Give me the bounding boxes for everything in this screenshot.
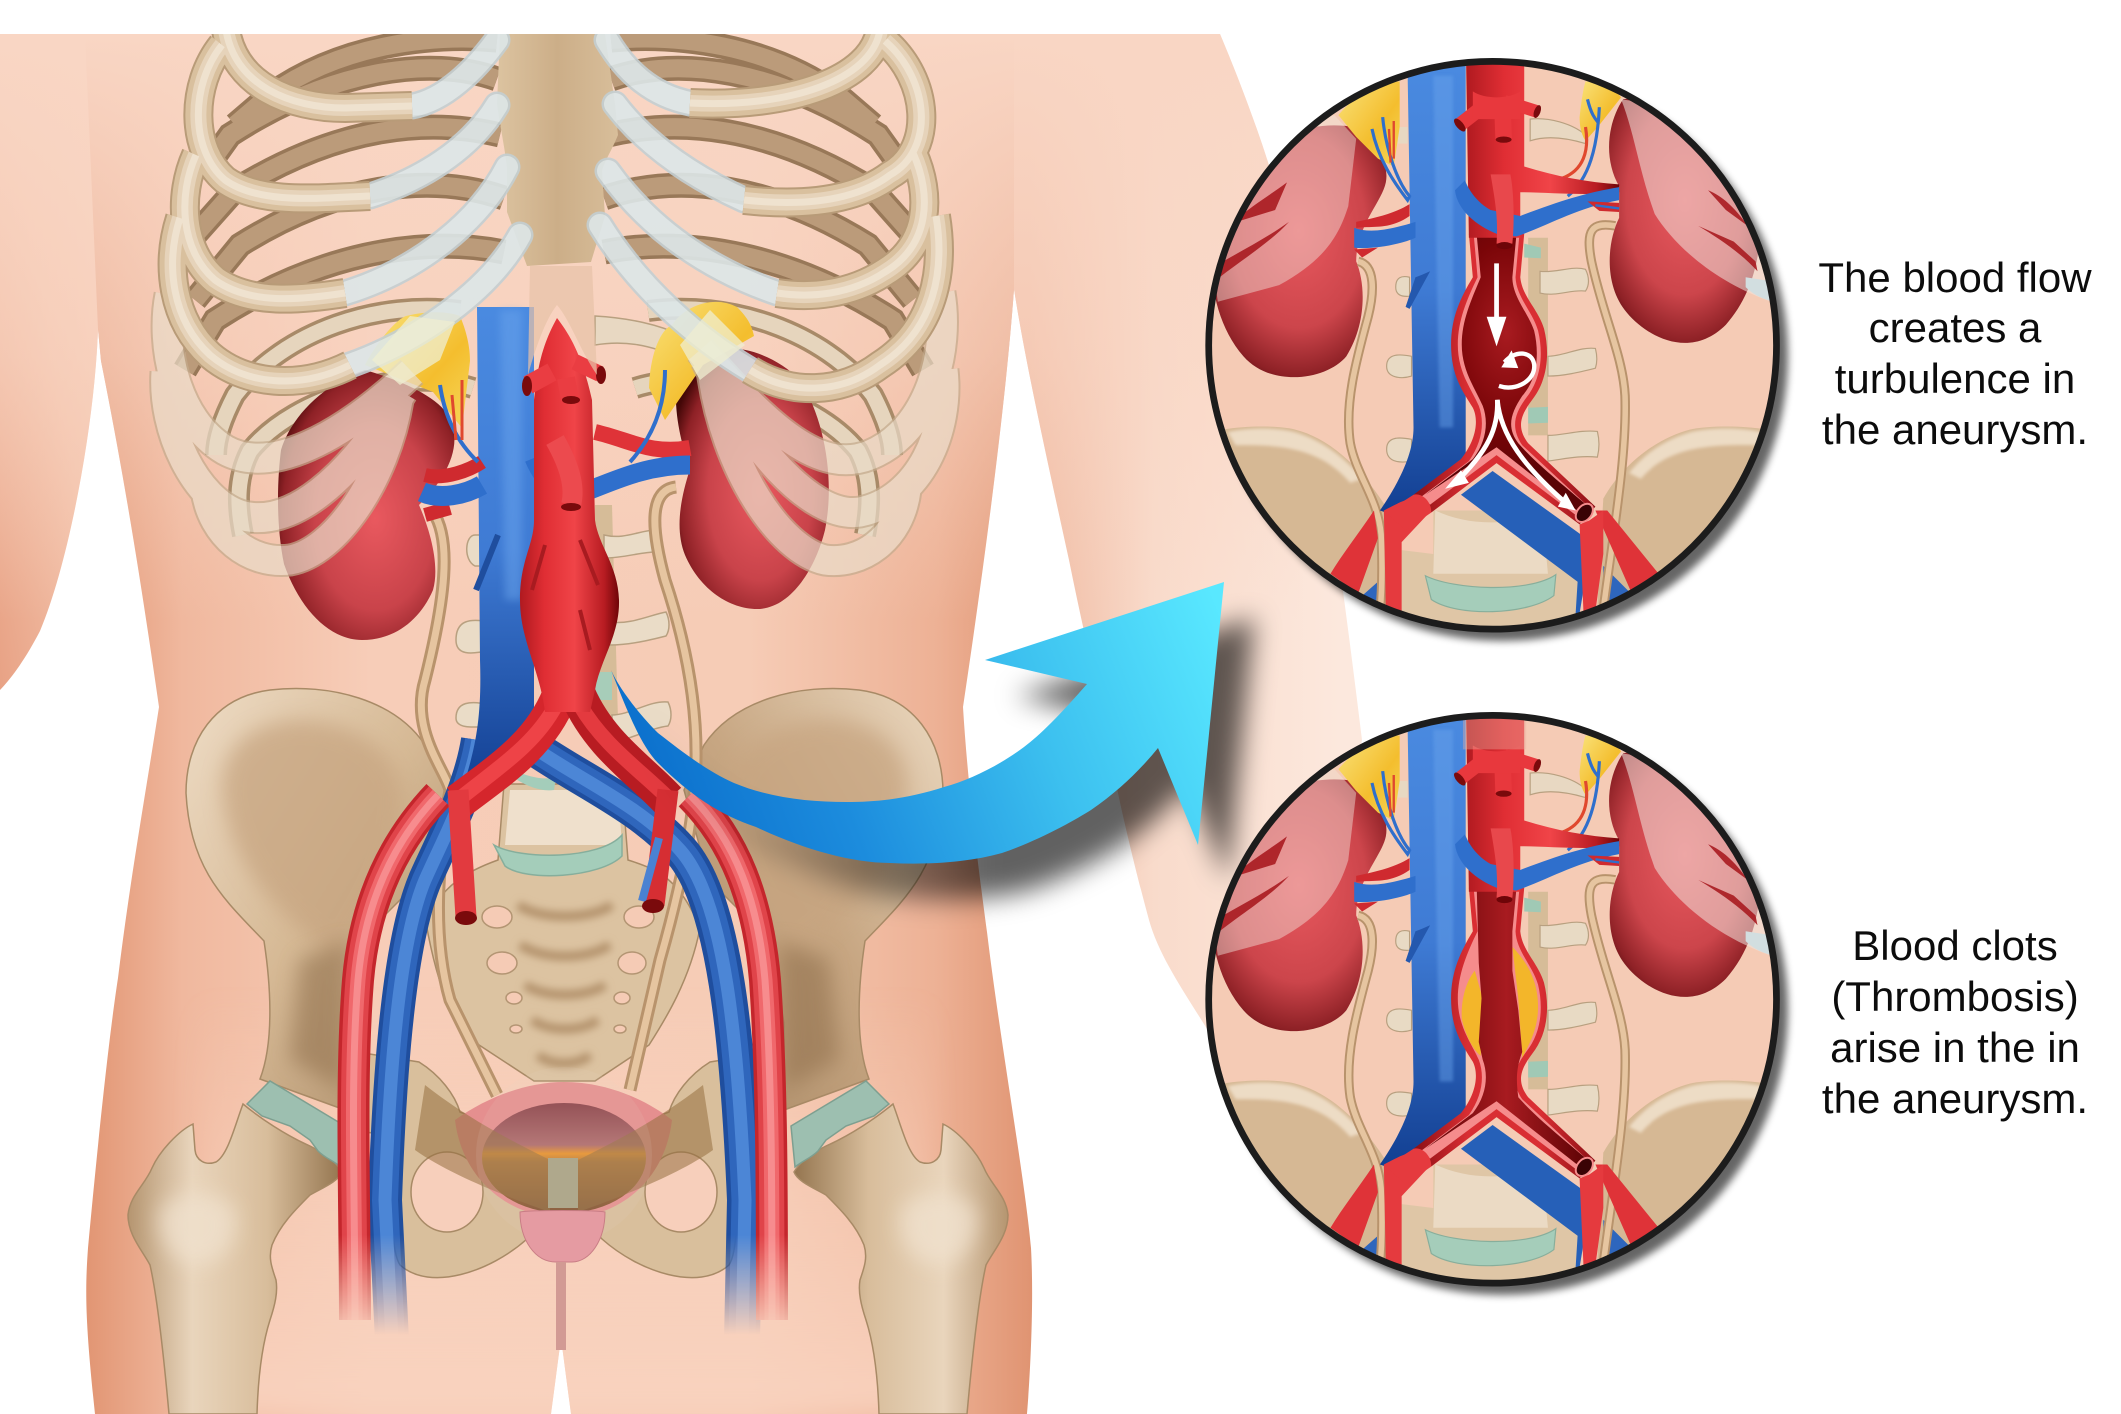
pubic bones right: [564, 1050, 784, 1278]
circle 2 border: [1209, 715, 1776, 1283]
common iliac left: [458, 695, 560, 802]
adrenal arteries: [452, 380, 462, 440]
caption 1: creates a: [1869, 304, 2042, 351]
inferior vena cava: [462, 307, 534, 790]
vertebra body highlight: [505, 790, 622, 845]
back ribs: [185, 39, 923, 535]
intervertebral disc: [494, 835, 622, 876]
ureter right: [630, 487, 696, 1090]
femur highlights: [159, 1193, 977, 1265]
adrenal veins: [440, 370, 665, 462]
aorta top fade: [1463, 718, 1526, 750]
common iliac right: [578, 695, 668, 800]
body silhouette: [0, 34, 1362, 1414]
cartilage: [345, 40, 777, 370]
thrombosed aneurysm: [1404, 888, 1596, 1178]
caption 2: the aneurysm.: [1822, 1075, 2088, 1122]
pubic arch over bladder: [415, 1085, 713, 1212]
caption 2: (Thrombosis): [1831, 973, 2079, 1020]
right vein: [530, 745, 745, 1340]
caption 1: [1818, 254, 2092, 453]
upper light wash: [0, 34, 1269, 564]
torso: [85, 34, 1032, 1414]
right arm: [1000, 34, 1362, 1100]
ilium inner shading: [222, 720, 907, 960]
thrombus clots: [1462, 947, 1538, 1058]
internal iliac branches: [455, 790, 668, 925]
arrow: [611, 582, 1224, 864]
sacrum ridges: [518, 905, 612, 1063]
caption 2: Blood clots: [1852, 922, 2058, 969]
spine vertebrae: [456, 316, 680, 742]
left artery: [353, 795, 438, 1320]
adrenal gland right: [649, 302, 754, 420]
ureter left: [421, 512, 497, 1095]
upper ribs left: [173, 30, 412, 381]
left renal vessels: [425, 462, 482, 515]
pubic bones left: [345, 1050, 565, 1278]
upper disc: [514, 770, 556, 790]
translucent lower ribs: [166, 293, 944, 561]
vena cava highlight: [500, 310, 522, 600]
aneurysm cross section: [1404, 234, 1596, 524]
lower light wash: [210, 1106, 927, 1414]
iliac vessels: [353, 740, 772, 1340]
aorta and renal vessels: [1452, 62, 1619, 249]
left vein: [385, 740, 478, 1340]
renal vessels: [422, 370, 690, 515]
L5 vertebra and sacrum: [426, 784, 700, 1081]
callout circle 2: thrombosis: [1200, 694, 1793, 1295]
right renal artery: [595, 432, 690, 450]
open lumen: [1425, 890, 1587, 1167]
caption 2: [1822, 922, 2088, 1122]
caption 1: the aneurysm.: [1822, 406, 2088, 453]
xiphoid process: [528, 266, 597, 375]
arrow shadow: [641, 618, 1254, 900]
small branch on vena cava: [476, 535, 498, 590]
right femur: [794, 1104, 1008, 1414]
adrenal translucent overlay: [372, 310, 745, 385]
kidney left: [278, 370, 454, 640]
flow arrows: [1445, 263, 1576, 511]
upper ribs right: [690, 30, 939, 388]
pink structure: [520, 1210, 605, 1262]
adrenal gland left: [365, 312, 470, 428]
callout circle 1: turbulence: [1200, 40, 1793, 641]
right renal vein: [534, 458, 690, 492]
sacral holes: [482, 906, 654, 1033]
right ilium: [684, 688, 943, 1110]
circle 1 border: [1209, 61, 1776, 629]
aorta and renal vessels: [1452, 716, 1619, 903]
left femur: [128, 1104, 342, 1414]
aorta with aneurysm: [520, 318, 619, 712]
ribcage sternum: [497, 34, 618, 266]
bladder and uterus: [415, 1067, 713, 1350]
aorta branches: [522, 362, 606, 650]
obturator holes: [411, 1152, 483, 1232]
left arm: [0, 34, 110, 690]
right hip cartilage: [791, 1081, 889, 1167]
left hip cartilage: [247, 1081, 345, 1167]
front ribs: [166, 30, 944, 561]
caption 1: turbulence in: [1835, 355, 2075, 402]
caption 2: arise in the in: [1830, 1024, 2080, 1071]
kidney right: [676, 348, 829, 609]
left ilium: [186, 688, 445, 1110]
right artery: [690, 795, 772, 1320]
urethra line: [556, 1262, 566, 1350]
pelvis: [128, 688, 1008, 1414]
caption 1: The blood flow: [1818, 254, 2092, 301]
ilium lower dark shading: [290, 940, 839, 1090]
